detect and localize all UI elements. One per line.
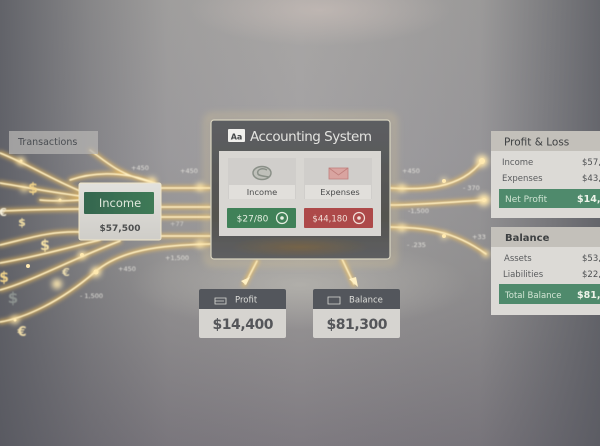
panel: balance sheet: Balance bbox=[505, 233, 550, 244]
glow nodes bbox=[11, 155, 490, 324]
flow lines: incoming transactions to income bbox=[0, 150, 210, 322]
panel: accounting system bbox=[211, 120, 390, 259]
income heading: Income bbox=[99, 196, 141, 210]
flow lines: system to reports bbox=[244, 161, 486, 285]
glow: warm reflection bbox=[230, 236, 370, 258]
glow: accounting system halo bbox=[207, 116, 394, 263]
heading: accounting system: Accounting System bbox=[250, 129, 372, 145]
balance value: $81,300 bbox=[326, 317, 388, 333]
small amount labels: +77 bbox=[170, 220, 184, 228]
panel: profit and loss: Profit & Loss bbox=[504, 136, 569, 148]
small amount labels bbox=[80, 164, 486, 300]
small amount labels: +450 bbox=[131, 164, 149, 172]
card: expenses bbox=[304, 158, 372, 199]
net profit row bbox=[499, 189, 600, 208]
panel: balance sheet: Assets bbox=[504, 254, 532, 264]
card: income bbox=[228, 158, 296, 199]
currency symbols: € bbox=[16, 325, 27, 340]
total balance row: Total Balance bbox=[504, 291, 561, 301]
arrow: to profit bbox=[241, 277, 250, 285]
panel: profit and loss: Income bbox=[502, 158, 533, 168]
net profit row: Net Profit bbox=[505, 195, 548, 205]
card: expenses: Expenses bbox=[320, 187, 360, 197]
income amount: $57,500 bbox=[100, 224, 140, 234]
button: expenses total bbox=[304, 208, 373, 228]
total balance row bbox=[499, 284, 600, 304]
panel: profit and loss bbox=[491, 131, 600, 218]
panel: inner bbox=[219, 151, 381, 236]
panel: balance sheet: Liabilities bbox=[503, 270, 544, 280]
small amount labels: -1,500 bbox=[408, 207, 429, 215]
small amount labels: +1,500 bbox=[165, 254, 189, 262]
panel: profit: Profit bbox=[235, 296, 258, 306]
arrow: to balance bbox=[349, 277, 358, 287]
currency symbols: $ bbox=[40, 238, 50, 254]
small amount labels: - 1,500 bbox=[80, 292, 103, 300]
panel: balance: Balance bbox=[349, 296, 383, 306]
icon: ledger: Aa bbox=[231, 132, 242, 142]
button: income total: $27/80 bbox=[237, 214, 269, 224]
small amount labels: +33 bbox=[472, 233, 486, 241]
currency symbols: $ bbox=[18, 216, 26, 229]
currency symbols bbox=[0, 181, 70, 340]
panel: transactions label: Transactions bbox=[17, 137, 77, 148]
icon: coin swirl bbox=[253, 166, 271, 180]
panel: profit and loss: Expenses bbox=[502, 174, 543, 184]
small amount labels: - .235 bbox=[407, 241, 426, 249]
panel: balance sheet bbox=[491, 227, 600, 315]
card: income: Income bbox=[247, 187, 277, 197]
panel: balance bbox=[313, 289, 400, 338]
small amount labels: +450 bbox=[118, 265, 136, 273]
profit value: $14,400 bbox=[212, 317, 274, 333]
button: income total bbox=[227, 208, 296, 228]
icon: ledger bbox=[228, 129, 245, 142]
small amount labels: +450 bbox=[402, 167, 420, 175]
icon: balance bbox=[328, 297, 340, 304]
small amount labels: +450 bbox=[180, 167, 198, 175]
button: expenses total: $44,180 bbox=[312, 214, 348, 224]
currency symbols: € bbox=[61, 266, 70, 279]
panel: transactions label bbox=[9, 131, 98, 154]
icon: envelope bbox=[329, 168, 348, 179]
panel: profit bbox=[199, 289, 286, 338]
panel: income bbox=[79, 183, 161, 240]
icon: profit bbox=[215, 298, 226, 304]
small amount labels: - 370 bbox=[463, 184, 480, 192]
currency symbols: $ bbox=[28, 181, 38, 197]
currency symbols: $ bbox=[8, 289, 18, 307]
